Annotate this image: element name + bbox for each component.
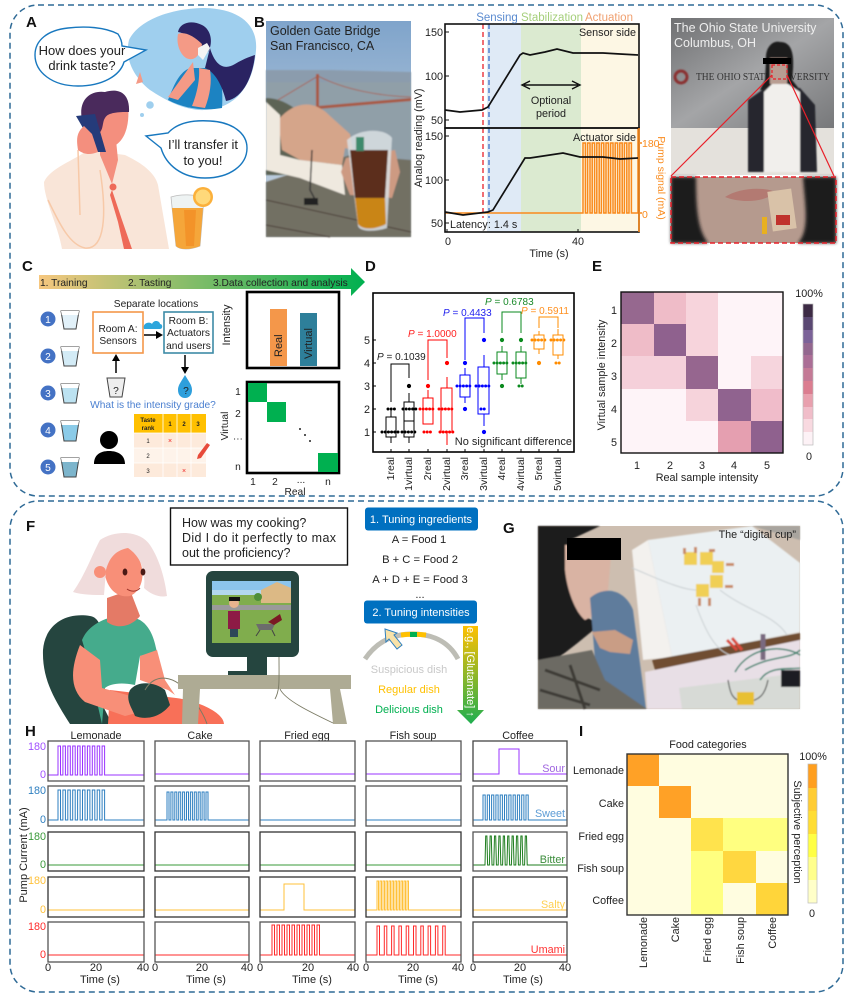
chart: intensity bars	[221, 292, 339, 368]
panel E: intensity heatmap: 5	[764, 460, 770, 472]
text: dish ratings: Suspicious dish	[371, 664, 447, 676]
panel I: food heatmap: Food categories	[669, 739, 747, 751]
panel H: pump current traces: Pump Current (mA)	[18, 807, 30, 903]
diagram: separate rooms: ?	[183, 386, 189, 397]
photo: person wearing device at Ohio State: Columbus, OH	[674, 36, 756, 50]
row: sweet traces: Sweet	[535, 808, 565, 820]
column titles: Lemonade	[70, 730, 122, 742]
panel D: box plots with P values: 2	[364, 404, 370, 416]
axis labels: Lemonade	[573, 765, 624, 777]
x axes: 20	[407, 962, 419, 974]
speech box: how was my cooking: out the proficiency?	[182, 546, 290, 560]
panel E: intensity heatmap: 3	[611, 371, 617, 383]
speech bubble: how does your drink taste: How does your	[39, 43, 126, 58]
axis labels	[573, 765, 779, 968]
chart: analog reading versus time: Time (s)	[529, 248, 569, 260]
x axes: 0	[257, 962, 263, 974]
P value labels: P = 0.6783	[485, 297, 534, 308]
table: taste rank sheet	[134, 414, 210, 477]
P value labels: P = 0.4433	[443, 308, 492, 319]
speech box: how was my cooking: Did I do it perfectly to max	[182, 531, 337, 545]
box pair 1 (black)	[382, 364, 417, 443]
photo: The “digital cup”	[719, 529, 796, 541]
panel E: intensity heatmap: 2	[611, 338, 617, 350]
axis labels: Fried egg	[578, 831, 624, 843]
panel E: intensity heatmap: 4	[731, 460, 737, 472]
table: taste rank sheet: 2	[146, 454, 150, 460]
axis labels: Lemonade	[638, 917, 650, 968]
panel D: box plots with P values	[364, 258, 574, 491]
x axis category labels: 2virtual	[441, 457, 453, 491]
x axes: 40	[137, 962, 149, 974]
row: salty traces: Salty	[541, 899, 566, 911]
panel D: box plots with P values: 1	[364, 427, 370, 439]
arrow: glutamate gradient	[457, 626, 484, 724]
x axes: 0	[152, 962, 158, 974]
row: sweet traces	[28, 785, 567, 826]
table: taste rank sheet: 3	[196, 422, 200, 428]
panel F: cooking game	[26, 508, 484, 724]
x axes: Time (s)	[80, 974, 120, 986]
column titles: Cake	[187, 730, 213, 742]
text: food recipes: ...	[415, 589, 425, 601]
panel D: box plots with P values: No significant difference	[455, 436, 572, 448]
text: food recipes: B + C = Food 2	[382, 554, 458, 566]
photo: person wearing device at Ohio State: The Ohio State University	[674, 21, 817, 35]
row: sour traces: Sour	[542, 763, 565, 775]
colorbar: 0	[806, 451, 812, 463]
trace: sensor side	[445, 49, 638, 112]
chart: analog reading versus time: 50	[431, 218, 443, 230]
chart: analog reading versus time: 100	[425, 71, 443, 83]
P value labels: P = 0.5911	[521, 306, 569, 317]
column titles: Fried egg	[284, 730, 330, 742]
photo	[538, 526, 800, 709]
panel E: intensity heatmap: 5	[611, 437, 617, 449]
table: taste rank sheet: ×	[182, 468, 186, 475]
x axes: 0	[363, 962, 369, 974]
panel: bottom group outline	[10, 501, 843, 992]
numbered intensity cups: 5	[45, 463, 51, 474]
arrow: optional period	[522, 81, 580, 89]
row: sour traces: 0	[40, 769, 46, 781]
chart: analog reading versus time: 100	[425, 175, 443, 187]
panel H: pump current traces	[18, 723, 571, 986]
chart: analog reading versus time: Pump signal (mA)	[655, 136, 667, 220]
row: sweet traces: 180	[28, 785, 46, 797]
x axis category labels: 1real	[385, 457, 397, 480]
panel E: intensity heatmap: Virtual sample intensity	[596, 319, 608, 430]
x axes: 40	[452, 962, 464, 974]
panel I: food heatmap: Subjective perception	[791, 780, 803, 884]
speech bubble: I'll transfer it to you: to you!	[183, 153, 223, 168]
text: dish ratings	[371, 664, 447, 716]
label I: I	[579, 723, 583, 740]
illustration: man on the phone	[44, 91, 169, 249]
speech bubble: I'll transfer it to you: I’ll transfer it	[168, 137, 238, 152]
diagram: separate rooms: Sensors	[99, 336, 137, 347]
speech bubble: how does your drink taste	[35, 27, 146, 86]
box pair 2 (red)	[420, 340, 454, 445]
box pair 3 (blue)	[457, 318, 491, 434]
arrow: workflow stages: 2. Tasting	[128, 278, 172, 289]
x axis category labels: 5real	[533, 457, 545, 480]
panel E: intensity heatmap: 4	[611, 404, 617, 416]
panel D: box plots with P values: 4	[364, 358, 370, 370]
chart: analog reading versus time: Optional	[531, 95, 571, 107]
axis labels: Fried egg	[702, 917, 714, 963]
table: taste rank sheet: rank	[142, 426, 155, 432]
photo: person wearing device at Ohio State	[671, 18, 836, 243]
row: salty traces: 180	[28, 875, 46, 887]
diagram: separate rooms: What is the intensity grade?	[90, 400, 216, 411]
x axes: Time (s)	[398, 974, 438, 986]
row: umami traces: 0	[40, 949, 46, 961]
x axis category labels: 4virtual	[515, 457, 527, 491]
x axis category labels: 4real	[496, 457, 508, 480]
chart: ideal confusion matrix	[220, 382, 339, 498]
box pair 4 (green)	[494, 312, 528, 388]
column titles: Fish soup	[390, 730, 436, 742]
illustration: monitor on desk with game scene	[178, 571, 351, 724]
panel: top group outline	[10, 5, 843, 496]
colorbar: 0	[809, 908, 815, 920]
P value labels: P = 0.1039	[377, 352, 426, 363]
axis labels: Fish soup	[735, 917, 747, 964]
chart: ideal confusion matrix: n	[235, 462, 241, 473]
chart: analog reading versus time: 150	[425, 131, 443, 143]
tag: tuning ingredients	[365, 508, 478, 530]
x axes	[45, 962, 571, 986]
chart: analog reading versus time: Sensor side	[579, 27, 636, 39]
diagram: separate rooms: Actuators	[167, 328, 210, 339]
chart: intensity bars: Virtual	[303, 328, 315, 359]
label C: C	[22, 258, 33, 275]
chart: analog reading versus time: period	[536, 108, 566, 120]
x axes: Time (s)	[503, 974, 543, 986]
photo: Golden Gate Bridge with cup: San Francisco, CA	[270, 39, 375, 53]
chart: ideal confusion matrix: 1	[250, 477, 256, 488]
chart: ideal confusion matrix: ⋯	[233, 434, 243, 445]
x axes: 0	[470, 962, 476, 974]
diagram: separate rooms: Room A:	[98, 324, 138, 335]
axis labels: Cake	[599, 798, 624, 810]
box pair 5 (orange)	[532, 317, 566, 365]
panel G: digital cup photo	[503, 520, 800, 709]
chart: ideal confusion matrix: ...	[297, 475, 305, 486]
trace: actuator pump signal	[445, 128, 638, 213]
chart: analog reading versus time: Stabilization	[521, 12, 583, 24]
row: bitter traces: 0	[40, 859, 46, 871]
row: umami traces: Umami	[531, 944, 565, 956]
text: food recipes	[372, 534, 468, 601]
text: food recipes: A = Food 1	[392, 534, 446, 546]
tag: tuning intensities	[364, 600, 477, 624]
x axes: 40	[559, 962, 571, 974]
x axis category labels: 2real	[422, 457, 434, 480]
label F: F	[26, 518, 35, 535]
label D: D	[365, 258, 376, 275]
diagram: separate rooms: Room B:	[169, 316, 208, 327]
chart: analog reading versus time: Analog reading (mV)	[413, 88, 425, 188]
diagram: separate rooms: Separate locations	[114, 299, 198, 310]
panel C: experimental workflow	[22, 258, 365, 498]
row: sour traces: 180	[28, 741, 46, 753]
heatmap cells	[627, 754, 788, 915]
illustration: woman on the phone	[128, 8, 256, 110]
row: bitter traces: Bitter	[540, 854, 565, 866]
P value labels: P = 1.0000	[408, 329, 457, 340]
chart: analog reading versus time: 0	[642, 209, 648, 221]
column titles: Coffee	[502, 730, 534, 742]
panel A: taste-sharing phone call	[26, 8, 256, 249]
axis labels: Coffee	[592, 895, 624, 907]
chart: intensity bars: Real	[273, 334, 285, 357]
chart: analog reading versus time: Sensing	[476, 12, 518, 24]
icon: juice glass with orange slice	[171, 187, 213, 249]
panel E: intensity heatmap: 2	[667, 460, 673, 472]
colorbar: 100%	[795, 288, 823, 300]
tag: tuning ingredients: 1. Tuning ingredients	[370, 514, 473, 526]
chart: analog reading versus time: 180	[642, 138, 660, 150]
chart: ideal confusion matrix: 2	[272, 477, 278, 488]
x axis category labels: 5virtual	[552, 457, 564, 491]
panel B: field demo and signal traces	[254, 12, 836, 260]
photo: Golden Gate Bridge with cup	[266, 21, 411, 237]
text: dish ratings: Delicious dish	[375, 704, 443, 716]
chart: ideal confusion matrix: 2	[235, 409, 241, 420]
chart: ideal confusion matrix: Virtual	[220, 412, 231, 440]
axis labels: Fish soup	[577, 863, 624, 875]
chart: analog reading versus time: 0	[445, 236, 451, 248]
diagram: separate rooms	[90, 299, 216, 411]
colorbar	[799, 751, 827, 920]
speech bubble: how does your drink taste: drink taste?	[48, 58, 116, 73]
P value labels	[377, 297, 569, 363]
axis labels: Cake	[670, 917, 682, 942]
photo: Golden Gate Bridge with cup: Golden Gate Bridge	[270, 24, 381, 38]
table: taste rank sheet: Taste	[140, 418, 156, 424]
x axis category labels: 1virtual	[403, 457, 415, 491]
inset: zoomed device on chin	[671, 177, 836, 243]
chart: ideal confusion matrix: Real	[285, 487, 305, 498]
x axes: Time (s)	[186, 974, 226, 986]
panel D: box plots with P values: 3	[364, 381, 370, 393]
column titles	[70, 730, 534, 742]
speech box: how was my cooking	[170, 508, 348, 565]
illustration: seated woman with controller	[43, 533, 224, 724]
numbered intensity cups	[40, 311, 79, 477]
chart: analog reading versus time: 50	[431, 115, 443, 127]
panel I: food heatmap	[573, 723, 827, 968]
x axes: 40	[241, 962, 253, 974]
chart: ideal confusion matrix: 1	[235, 387, 241, 398]
tag: tuning intensities: 2. Tuning intensities	[372, 607, 470, 619]
label H: H	[25, 723, 36, 740]
numbered intensity cups: 4	[45, 426, 51, 437]
label E: E	[592, 258, 602, 275]
row: umami traces: 180	[28, 921, 46, 933]
table: taste rank sheet: ×	[168, 438, 172, 445]
row: salty traces	[28, 875, 567, 917]
arrow: workflow stages: 3.Data collection and analysis	[213, 278, 348, 289]
diagram: separate rooms: and users	[166, 341, 211, 352]
label B: B	[254, 14, 265, 31]
chart: ideal confusion matrix: n	[325, 477, 331, 488]
icon: person silhouette	[94, 431, 125, 464]
x axis category labels	[385, 457, 564, 491]
speech box: how was my cooking: How was my cooking?	[182, 516, 306, 530]
row: sweet traces: 0	[40, 814, 46, 826]
panel E: intensity heatmap: Real sample intensity	[656, 472, 759, 484]
row: salty traces: 0	[40, 904, 46, 916]
table: taste rank sheet: 3	[146, 469, 150, 475]
panel E: intensity heatmap: 1	[634, 460, 640, 472]
x axes: 20	[196, 962, 208, 974]
gauge: dish quality arc with arrow	[365, 629, 458, 659]
panel E: intensity heatmap: 3	[699, 460, 705, 472]
chart: analog reading versus time: 150	[425, 27, 443, 39]
chart: analog reading versus time: Latency: 1.4 s	[450, 219, 518, 231]
trace: actuator side	[445, 153, 638, 215]
chart: analog reading versus time: Actuation	[585, 12, 633, 24]
speech bubble: I'll transfer it to you	[146, 121, 247, 178]
x axes: Time (s)	[292, 974, 332, 986]
chart: analog reading versus time	[413, 12, 667, 260]
arrow: workflow stages	[39, 268, 365, 296]
panel E: intensity heatmap: 1	[611, 305, 617, 317]
arrow: workflow stages: 1. Training	[40, 278, 88, 289]
x axes: 20	[90, 962, 102, 974]
text: food recipes: A + D + E = Food 3	[372, 574, 468, 586]
text: dish ratings: Regular dish	[378, 684, 440, 696]
x axes: 20	[514, 962, 526, 974]
chart: analog reading versus time: Actuator side	[573, 132, 636, 144]
colorbar	[795, 288, 823, 463]
chart: intensity bars: Intensity	[221, 304, 233, 345]
panel D: box plots with P values: 5	[364, 335, 370, 347]
table: taste rank sheet: 2	[182, 422, 186, 428]
numbered intensity cups: 1	[45, 315, 51, 326]
row: umami traces	[28, 921, 567, 962]
x axis category labels: 3real	[459, 457, 471, 480]
panel E: intensity heatmap	[592, 258, 823, 484]
row: sour traces	[28, 741, 567, 781]
row: bitter traces: 180	[28, 831, 46, 843]
label G: G	[503, 520, 515, 537]
x axes: 40	[347, 962, 359, 974]
colorbar: 100%	[799, 751, 827, 763]
x axes: 20	[302, 962, 314, 974]
x axis category labels: 3virtual	[478, 457, 490, 491]
numbered intensity cups: 2	[45, 352, 51, 363]
table: taste rank sheet: 1	[168, 422, 172, 428]
diagram: separate rooms: ?	[113, 386, 119, 397]
photo: person wearing device at Ohio State: THE OHIO STATE UNIVERSITY	[696, 72, 830, 83]
x axes: 0	[45, 962, 51, 974]
row: bitter traces	[28, 831, 567, 871]
arrow: glutamate gradient: e.g., [Glutamate] ↑	[464, 627, 476, 717]
chart: analog reading versus time: 40	[572, 236, 584, 248]
heatmap cells	[621, 292, 783, 453]
table: taste rank sheet: 1	[146, 439, 150, 445]
numbered intensity cups: 3	[45, 389, 51, 400]
label A: A	[26, 14, 37, 31]
axis labels: Coffee	[767, 917, 779, 949]
